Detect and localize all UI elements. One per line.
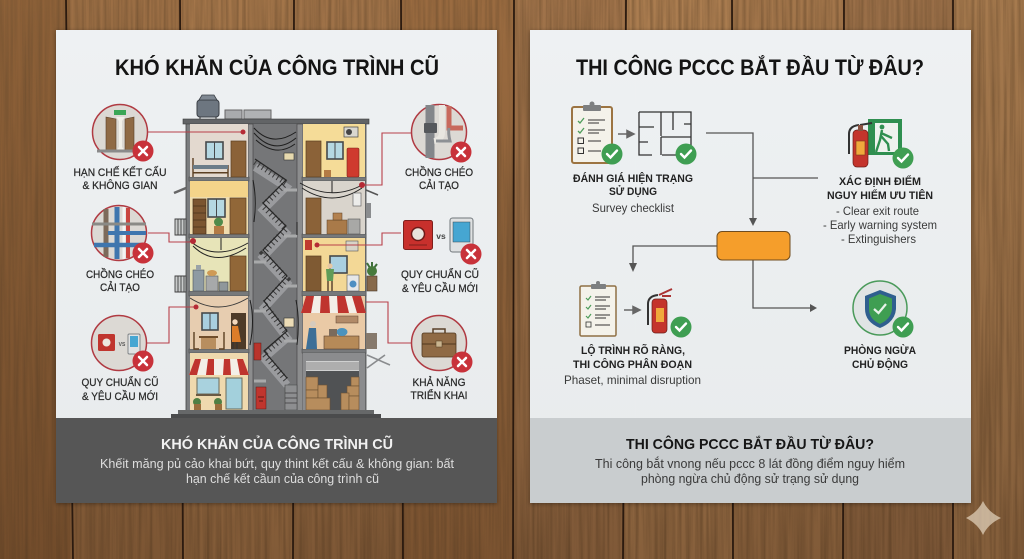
callout: chồng chéo cải tạo left — [86, 206, 154, 294]
room: left ground floor shop — [189, 353, 249, 410]
right footer band: phòng ngừa chủ động sử trạng sử dụng — [641, 471, 859, 486]
icon: old vs new device: VS — [119, 342, 126, 348]
bullet list: - Clear exit route — [836, 204, 919, 218]
step: xác định điểm nguy hiểm: NGUY HIỂM ƯU TIÊN — [827, 189, 933, 202]
step: xác định điểm nguy hiểm — [823, 119, 937, 246]
room: right floor 5 — [303, 124, 365, 177]
icon: crossing pipes — [92, 206, 154, 264]
floor slabs — [189, 177, 366, 353]
step: phòng ngừa chủ động — [844, 281, 916, 371]
label: HẠN CHẾ KẾT CẤU — [74, 166, 167, 179]
callout: quy chuẩn right — [401, 218, 482, 295]
label: ĐÁNH GIÁ HIỆN TRẠNG — [573, 172, 693, 185]
arrowheads — [629, 218, 817, 312]
step: phòng ngừa chủ động: CHỦ ĐỘNG — [852, 358, 908, 371]
callout: hạn chế kết cấu: & KHÔNG GIAN — [82, 179, 158, 192]
bullet list: - Early warning system — [823, 218, 937, 232]
room: right ground floor garage — [303, 353, 365, 410]
sub label: Survey checklist — [592, 201, 675, 215]
icon: exit sign — [868, 119, 902, 155]
label: CHỒNG CHÉO — [86, 268, 154, 281]
stairwell wires — [250, 128, 298, 345]
room: left floor 3 kitchen — [190, 238, 248, 291]
callout: chồng chéo cải tạo right — [405, 104, 473, 192]
label: KHẢ NĂNG — [412, 376, 466, 389]
flow connectors — [633, 133, 818, 308]
bullet list: - Extinguishers — [841, 232, 916, 246]
right footer band — [530, 418, 971, 503]
rooftop tank and units — [197, 95, 271, 119]
icon: check badge — [892, 148, 914, 168]
icon: check badge 2 — [676, 144, 696, 164]
orange center box — [717, 232, 790, 260]
callout: quy chuẩn left: & YÊU CẦU MỚI — [82, 390, 158, 403]
icon: fire extinguisher — [849, 123, 872, 167]
left title: KHÓ KHĂN CỦA CÔNG TRÌNH CŨ — [115, 55, 439, 80]
sub label: Phaset, minimal disruption — [564, 373, 701, 387]
room: left floor 4 living — [190, 181, 248, 234]
room: left floor 2 dining — [190, 296, 248, 349]
callout: hạn chế kết cấu — [74, 104, 167, 192]
icon: check badge — [670, 316, 692, 338]
building cross-section — [171, 95, 390, 418]
callout: khả năng triển khai: TRIỂN KHAI — [410, 389, 468, 402]
callout: quy chuẩn right: & YÊU CẦU MỚI — [402, 282, 478, 295]
callout: quy chuẩn left — [82, 316, 159, 403]
callout: khả năng triển khai — [410, 316, 472, 402]
bullet list — [823, 204, 937, 246]
step: đánh giá hiện trạng — [572, 102, 696, 215]
step: lộ trình rõ ràng: THI CÔNG PHÂN ĐOẠN — [573, 358, 692, 371]
label: XÁC ĐỊNH ĐIỂM — [839, 175, 921, 188]
step: lộ trình rõ ràng — [564, 281, 701, 387]
icon: sparkle watermark — [966, 501, 1001, 535]
room: right floor 4 — [300, 181, 365, 234]
connector dots — [190, 130, 365, 310]
arrow — [618, 130, 634, 138]
icon: survey clipboard — [572, 102, 612, 163]
icon: alarm panel vs device: vs — [436, 231, 446, 241]
icon: door — [92, 104, 154, 162]
label: QUY CHUẨN CŨ — [82, 376, 159, 389]
panel: thi công pccc bắt đầu từ đâu — [530, 30, 971, 503]
stair lamps and cabinets — [254, 153, 294, 409]
icon: briefcase — [412, 316, 472, 372]
left panel background — [56, 30, 497, 503]
exterior fixtures — [174, 188, 390, 368]
room: left floor 5 bedroom — [190, 124, 248, 177]
panel: khó khăn của công trình cũ — [56, 30, 497, 503]
building shell — [183, 119, 369, 412]
icon: clipboard — [580, 281, 616, 336]
icon: shield — [853, 281, 907, 335]
icon: fire extinguisher — [648, 289, 672, 333]
left footer band: hạn chế kết cầun của công trình cũ — [186, 471, 379, 486]
icon: floor plan — [639, 112, 691, 155]
callout: chồng chéo cải tạo left: CẢI TẠO — [100, 281, 140, 294]
right title: THI CÔNG PCCC BẮT ĐẦU TỪ ĐÂU? — [576, 55, 924, 80]
step: đánh giá hiện trạng: SỬ DỤNG — [609, 185, 657, 198]
label: LỘ TRÌNH RÕ RÀNG, — [581, 344, 685, 357]
icon: check badge 1 — [602, 144, 622, 164]
left footer band: Khếit măng pủ cảo khai bứt, quy thint kết cấu & không gian: bất — [100, 456, 454, 471]
connector lines — [147, 132, 413, 343]
icon: pipes — [412, 104, 472, 162]
right footer band: THI CÔNG PCCC BẮT ĐẦU TỪ ĐÂU? — [626, 435, 874, 453]
building base — [171, 410, 381, 418]
left footer band — [56, 418, 497, 503]
room: right floor 2 shop — [301, 296, 366, 349]
arrow — [624, 306, 640, 314]
left footer band: KHÓ KHĂN CỦA CÔNG TRÌNH CŨ — [161, 435, 393, 453]
label: PHÒNG NGỪA — [844, 344, 916, 357]
right panel background — [530, 30, 971, 503]
label: QUY CHUẨN CŨ — [401, 268, 479, 281]
icon: check badge — [892, 316, 914, 338]
stairs — [254, 159, 297, 410]
callout: chồng chéo cải tạo right: CẢI TẠO — [419, 179, 459, 192]
right footer band: Thi công bắt vnong nếu pccc 8 lát đồng điểm nguy hiểm — [595, 456, 905, 471]
label: CHỒNG CHÉO — [405, 166, 473, 179]
room: right floor 3 — [303, 238, 365, 291]
